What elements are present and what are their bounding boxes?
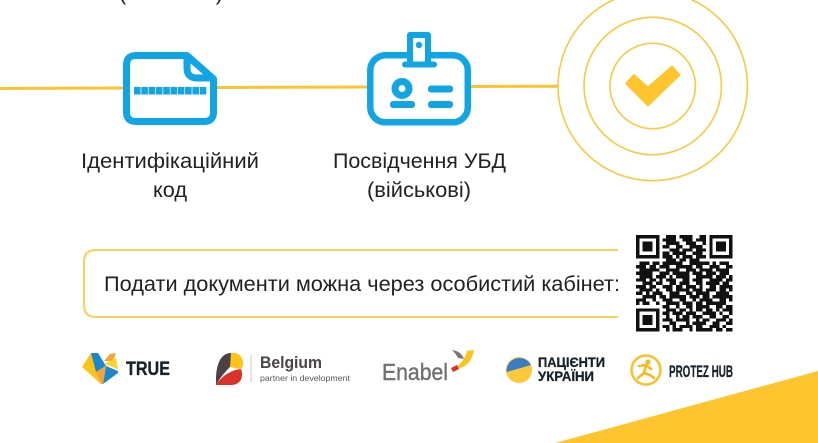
icon: veteran ID badge <box>370 35 468 122</box>
logo: Enabel <box>382 350 474 385</box>
logo: Belgium partner in development: partner in development <box>260 373 351 383</box>
logo: Belgium partner in development <box>216 353 351 385</box>
logo: TRUE <box>82 353 170 384</box>
label: veteran ID: Посвідчення УБД <box>333 150 506 173</box>
logo: Belgium partner in development: Belgium <box>260 353 322 372</box>
callout box outline <box>84 250 618 317</box>
label: veteran ID <box>333 150 506 202</box>
icon: check mark <box>626 67 679 105</box>
callout text: Подати документи можна через особистий кабінет: <box>104 273 620 296</box>
logo: TRUE: TRUE <box>126 359 170 380</box>
logo: Enabel: Enabel <box>382 359 448 385</box>
label: veteran ID: (військові) <box>367 179 471 202</box>
logo: Protez Hub <box>632 356 733 384</box>
logo: Patients of Ukraine: ПАЦІЄНТИ <box>538 355 605 370</box>
label: identification code: Ідентифікаційний <box>81 150 259 173</box>
bottom right corner triangle <box>555 371 818 443</box>
logo: Patients of Ukraine <box>506 355 605 384</box>
icon: identification code document <box>126 56 214 122</box>
logo: Patients of Ukraine: УКРАЇНИ <box>538 369 594 384</box>
label: identification code <box>81 150 259 202</box>
timeline connector <box>0 86 558 88</box>
label: identification code: код <box>153 179 187 202</box>
target circles with check mark <box>558 0 747 181</box>
logo: Protez Hub: PROTEZ HUB <box>669 362 733 381</box>
QR code <box>636 237 733 330</box>
